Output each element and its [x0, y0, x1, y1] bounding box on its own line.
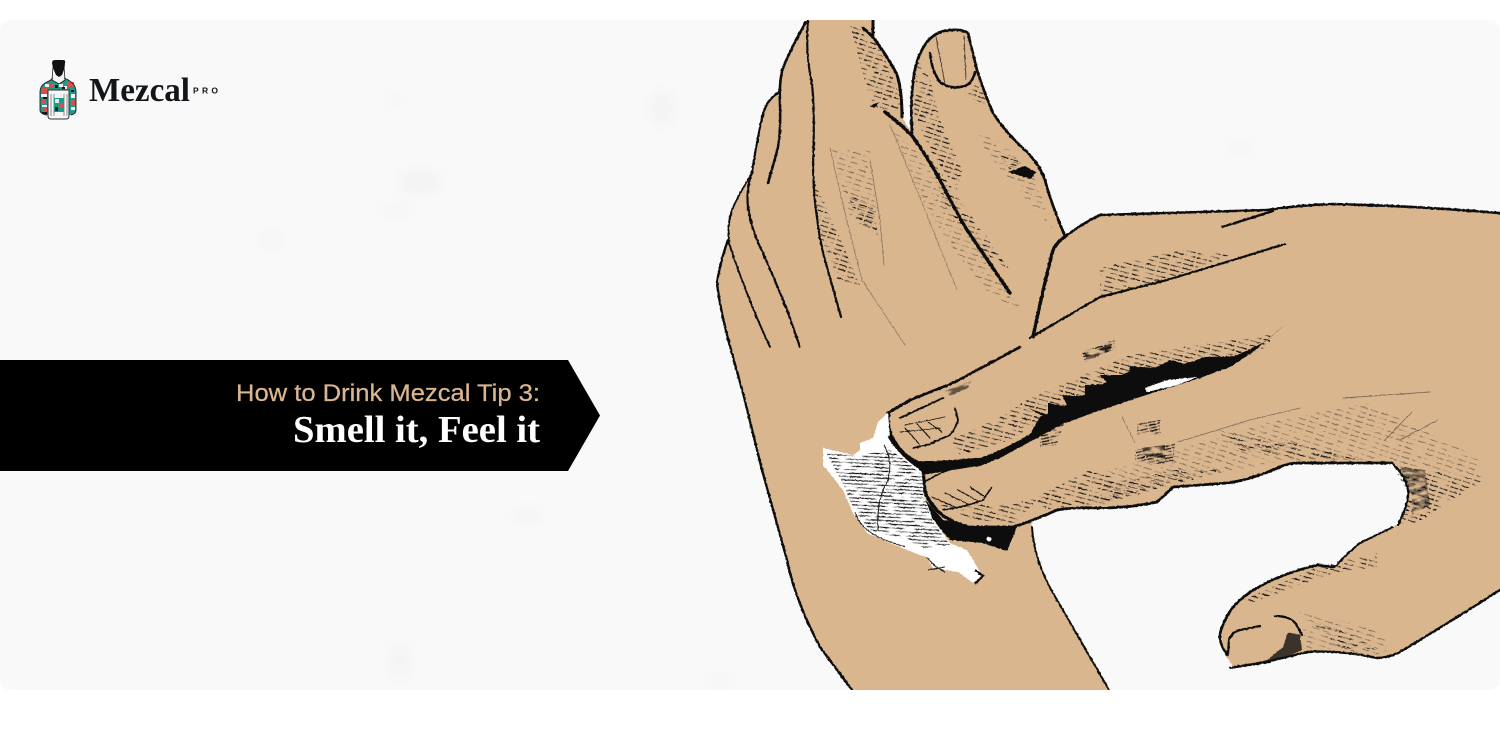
wordmark: PRO: PRO [193, 86, 218, 96]
faint wrinkle lines [1343, 392, 1430, 398]
panel: background [262, 90, 1247, 681]
title: Smell it, Feel it [293, 409, 540, 451]
thumb nail [1228, 616, 1302, 653]
knuckle shadow [870, 102, 1036, 179]
mezcal smear on wrist [823, 413, 1017, 584]
under-finger shadow [923, 497, 1017, 551]
left hand contour [717, 20, 1064, 690]
right hand contour [888, 204, 1500, 702]
wordmark: Mezcal: Mezcal [89, 72, 190, 109]
highlight between fingers [1145, 377, 1198, 392]
logo: Mezcal Pro [40, 60, 218, 119]
smear hatching [826, 450, 950, 548]
middle finger nail [943, 487, 992, 510]
fingernail [930, 53, 975, 87]
left hand and forearm [717, 8, 1116, 702]
finger jagged shading [1028, 356, 1240, 425]
left hand hatching [813, 25, 1052, 312]
right hand hatching [940, 250, 1483, 655]
icon: mezcal bottle [40, 60, 76, 119]
right hand [888, 204, 1500, 702]
palm crease lines [807, 20, 841, 317]
banner shape [0, 360, 600, 471]
banner: tip title [0, 360, 600, 471]
illustration: hands rubbing mezcal on the wrist [717, 8, 1500, 702]
black shadow between fingers [903, 323, 1287, 475]
subtitle: How to Drink Mezcal Tip 3: [236, 380, 540, 407]
index finger nail [900, 398, 958, 448]
